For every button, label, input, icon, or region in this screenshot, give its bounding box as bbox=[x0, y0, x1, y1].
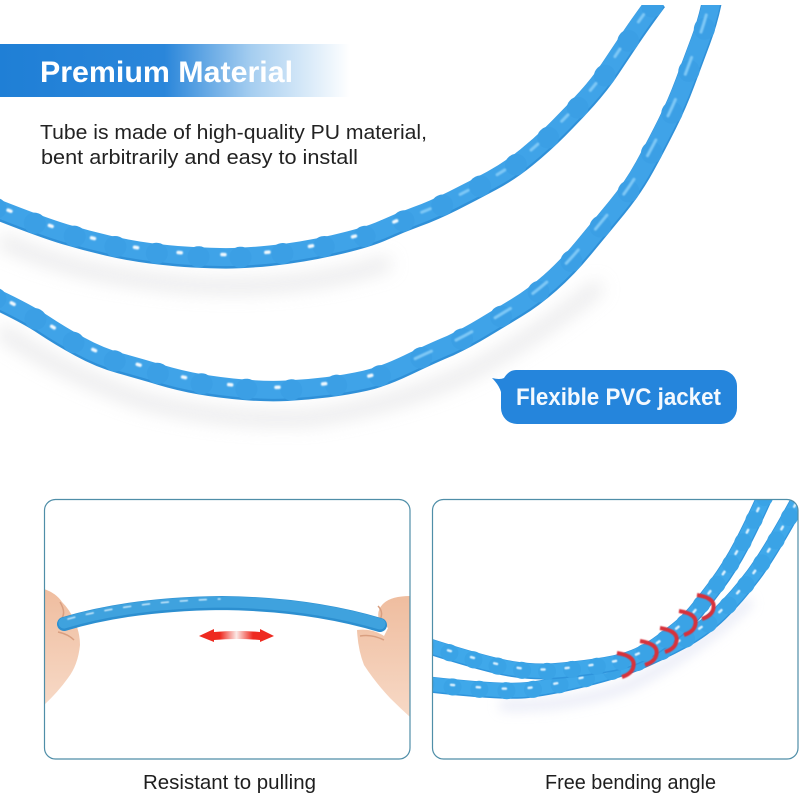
icon: left hand bbox=[44, 589, 80, 705]
panel: free bending angle bbox=[425, 492, 800, 759]
heading banner bbox=[0, 44, 350, 97]
main photo: two blue tubes bbox=[0, 0, 712, 419]
callout: flexible PVC jacket bbox=[492, 370, 737, 424]
tube: rear bbox=[425, 496, 800, 691]
description text: bent arbitrarily and easy to install bbox=[41, 146, 358, 169]
shadow under tubes bbox=[0, 240, 600, 419]
description text bbox=[40, 121, 427, 169]
icon: red double arrow bbox=[199, 629, 274, 642]
panel: resistant to pulling bbox=[44, 499, 410, 759]
shadow under bent tubes bbox=[500, 600, 750, 705]
icon: right hand bbox=[357, 596, 410, 717]
tube: lower bbox=[0, 0, 712, 391]
caption: resistant to pulling: Resistant to pulling bbox=[143, 771, 316, 794]
heading text: Premium Material bbox=[40, 56, 293, 89]
callout: flexible PVC jacket: Flexible PVC jacket bbox=[516, 384, 721, 411]
tube: pulled cable bbox=[64, 599, 380, 625]
description text: Tube is made of high-quality PU material, bbox=[40, 121, 427, 144]
caption: free bending angle: Free bending angle bbox=[545, 771, 716, 794]
tube: upper bbox=[0, 0, 657, 259]
icon: red bend rings bbox=[617, 595, 714, 677]
tube: front bbox=[425, 492, 766, 671]
